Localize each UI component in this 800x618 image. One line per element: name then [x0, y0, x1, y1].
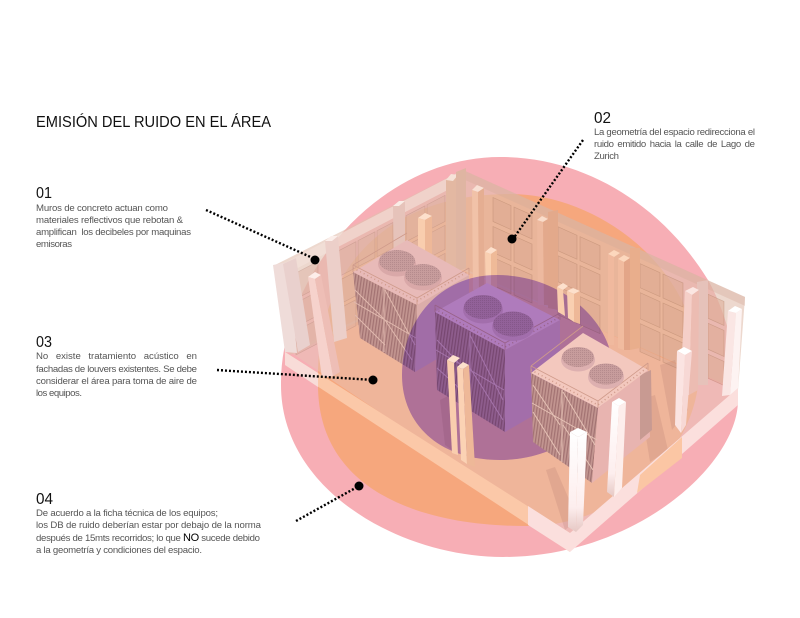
title: EMISIÓN DEL RUIDO EN EL ÁREA — [36, 112, 271, 131]
text block 01: amplifican los decibeles por maquinas — [36, 227, 191, 238]
leader 01 — [206, 210, 320, 264]
text block 03 — [36, 334, 197, 399]
short pillars over purple — [557, 283, 580, 324]
text block 03: 03 — [36, 334, 52, 351]
text block 01: 01 — [36, 185, 52, 202]
text block 01: Muros de concreto actuan como — [36, 203, 168, 214]
wall: back right — [463, 170, 745, 399]
text block 01: materiales reflectivos que rebotan & — [36, 215, 184, 226]
text block 03: los equipos. — [36, 388, 82, 399]
text block 02 — [594, 110, 755, 162]
text block 04: los DB de ruido deberían estar por debajo de la norma — [36, 520, 262, 531]
text block 02: Zurich — [594, 151, 619, 162]
text block 01: emisoras — [36, 239, 72, 250]
floor shadows — [440, 360, 688, 530]
front low wall: left band — [285, 352, 570, 552]
text block 04: 04 — [36, 491, 53, 508]
noise zone: outer pink — [281, 157, 738, 557]
noise zone: middle orange — [318, 194, 699, 526]
text block 03: considerar el área para toma de aire de — [36, 376, 197, 387]
text block 03: No existe tratamiento acústico en — [36, 351, 197, 362]
unit 1: cooling tower — [353, 233, 469, 372]
leader 04 — [296, 482, 364, 521]
pilasters attached to walls — [273, 168, 708, 385]
text block 04: a la geometría y condiciones del espacio. — [36, 545, 202, 556]
text block 04: De acuerdo a la ficha técnica de los equipos; — [36, 508, 218, 519]
text block 02: 02 — [594, 110, 611, 127]
pillars: front — [447, 347, 692, 532]
text block 04: después de 15mts recorridos; lo que NO sucede debido — [36, 532, 260, 544]
text block 02: La geometría del espacio redirecciona el — [594, 127, 755, 138]
text block 04 — [36, 491, 262, 556]
front low wall: right band — [570, 388, 738, 552]
pillars: back — [308, 185, 742, 396]
noise zone: inner purple — [402, 275, 613, 460]
building: floor — [290, 268, 738, 540]
leader 02 — [508, 140, 583, 244]
text block 01 — [36, 185, 191, 250]
unit 3: cooling tower — [531, 326, 652, 483]
text block 03: fachadas de louvers existentes. Se debe — [36, 364, 197, 375]
text block 02: ruido emitido hacia la calle de Lago de — [594, 139, 755, 150]
leader 03 — [217, 370, 378, 384]
unit 2: cooling tower — [435, 283, 560, 432]
wall: back left — [275, 170, 463, 363]
